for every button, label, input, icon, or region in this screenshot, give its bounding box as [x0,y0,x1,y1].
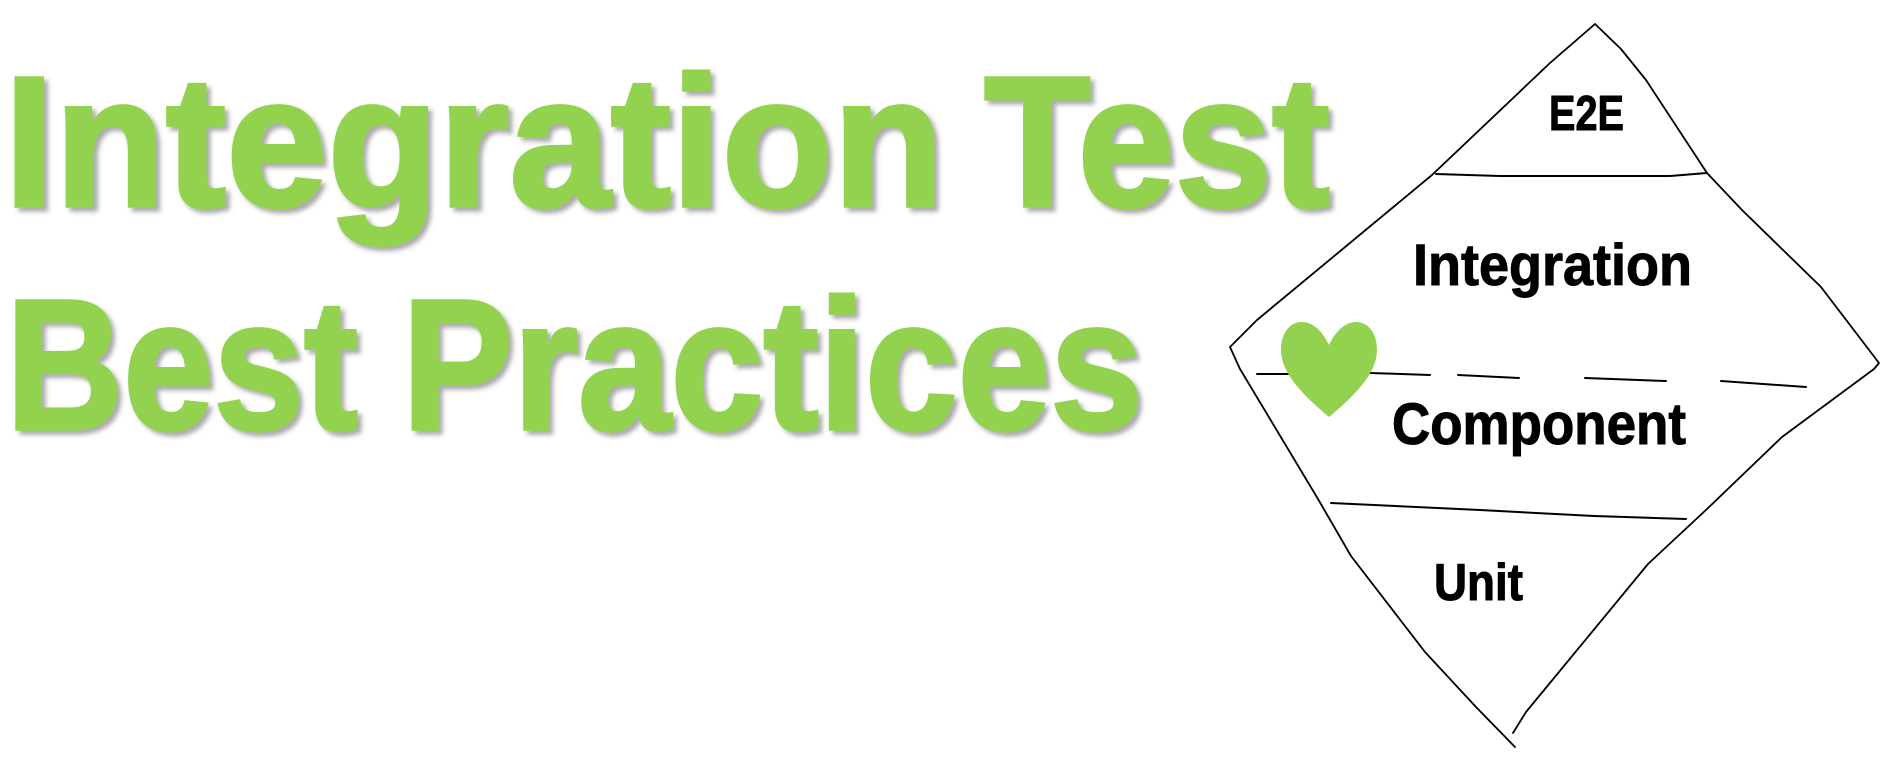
title line 1: Integration Test: Test [984,39,1330,246]
diagram: testing diamond [1230,24,1879,747]
dashed divider: Integration / Component [1257,373,1806,387]
label: Unit: Unit [1434,554,1523,612]
divider: E2E / Integration [1436,173,1707,176]
title line 2: Best Practices: Best [6,262,358,469]
label: Component: Component [1392,392,1686,457]
icon: heart [1281,322,1377,417]
diamond outline [1230,24,1879,747]
divider: Component / Unit [1331,503,1686,519]
title line 2: Best Practices: Practices [402,262,1143,469]
title line 2: Best Practices [6,262,1143,469]
title line 1: Integration Test: Integration [4,39,944,246]
label: E2E: E2E [1549,87,1624,141]
label: Integration: Integration [1413,233,1692,298]
title [4,39,1330,469]
